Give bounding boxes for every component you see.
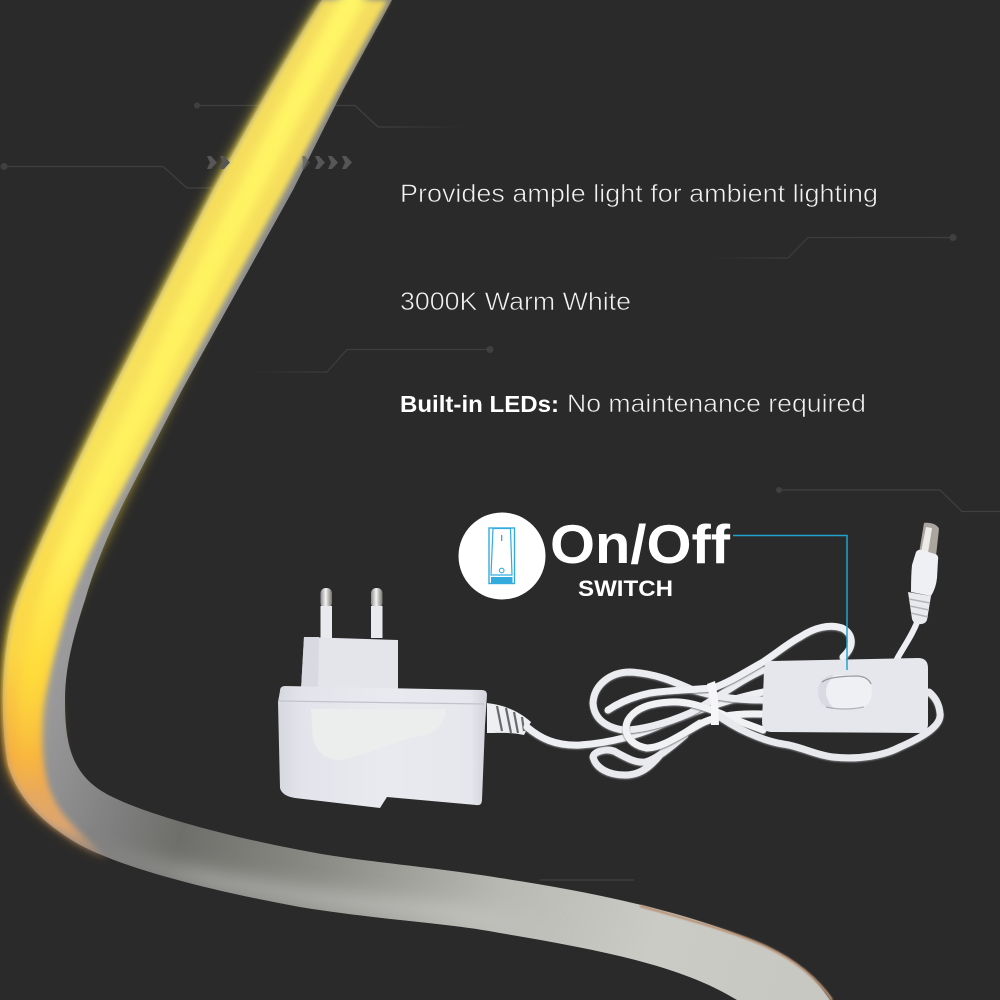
cable from adapter bbox=[527, 692, 763, 745]
orange rim at far end bbox=[640, 906, 832, 1000]
soft highlight along lower edge of unlit tube bbox=[124, 853, 499, 933]
switch housing bbox=[762, 658, 928, 733]
outer glow bbox=[3, 0, 360, 860]
printed cable strand and top loop bbox=[608, 626, 851, 710]
jack strain relief bbox=[908, 592, 931, 624]
feature text: built-in LEDs: Built-in LEDs: bbox=[400, 391, 559, 417]
strain relief bbox=[487, 703, 531, 735]
jack body bbox=[911, 550, 938, 596]
ribbed grip bbox=[311, 709, 446, 760]
tail loop bbox=[593, 723, 700, 775]
long loop under switch bbox=[716, 692, 940, 758]
adapter body bbox=[278, 686, 487, 808]
plug pins bbox=[320, 588, 382, 638]
plug housing bbox=[301, 637, 398, 690]
feature text: ambient lighting: Provides ample light for ambient lighting bbox=[400, 180, 878, 208]
bright centre of lit portion bbox=[29, 0, 358, 790]
left big loop bbox=[593, 670, 763, 730]
cable to DC jack bbox=[897, 620, 918, 659]
cable tie bbox=[707, 681, 719, 725]
metal tip bbox=[919, 523, 939, 556]
background circuit lines bbox=[0, 102, 1000, 880]
feature text: built-in LEDs: No maintenance required bbox=[567, 390, 866, 418]
heading: On/Off: On/Off bbox=[550, 513, 731, 575]
icon: rocker switch bbox=[458, 512, 546, 600]
chevrons bbox=[207, 156, 352, 169]
DC jack connector bbox=[908, 523, 939, 624]
cable and loops bbox=[527, 620, 940, 775]
inner loop bbox=[626, 702, 763, 748]
feature text: colour temperature: 3000K Warm White bbox=[400, 288, 631, 316]
power adapter bbox=[278, 588, 531, 808]
blue callout line bbox=[733, 536, 847, 670]
lit portion bbox=[3, 0, 388, 860]
subheading: SWITCH: SWITCH bbox=[578, 576, 673, 601]
feature text: built-in LEDs bbox=[400, 390, 866, 418]
inline switch bbox=[762, 658, 928, 733]
seam bbox=[279, 701, 484, 704]
rocker bbox=[818, 675, 872, 709]
